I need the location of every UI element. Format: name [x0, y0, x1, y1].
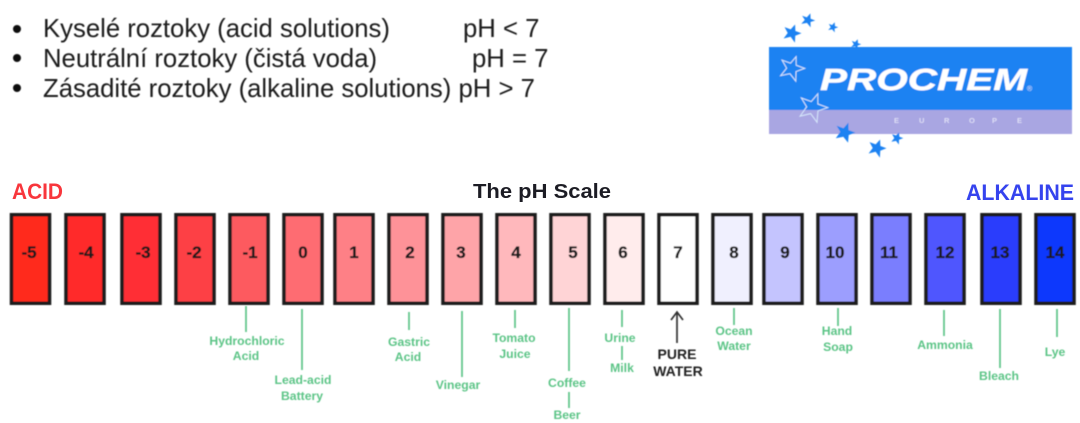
bullet: acid solutions: Kyselé roztoky (acid solutions)	[43, 15, 390, 43]
label: Pure Water with arrow: WATER	[653, 363, 703, 379]
logo: Prochem Europe: EUROPE	[894, 116, 1022, 125]
box 12	[926, 215, 964, 303]
logo: Prochem Europe	[769, 11, 1072, 159]
bullet: neutral solutions	[13, 45, 548, 73]
scale boxes	[12, 215, 1074, 303]
box -5: -5	[21, 243, 37, 262]
logo: Prochem Europe: PROCHEM	[820, 62, 1029, 97]
box 11: 11	[880, 243, 898, 262]
label: Lead-acid Battery	[275, 309, 331, 403]
label: Lead-acid Battery: Battery	[281, 389, 323, 403]
box 8: 8	[729, 243, 739, 262]
box 3	[443, 215, 481, 303]
bullet: alkaline solutions: Zásadité roztoky (alkaline solutions) pH > 7	[43, 75, 535, 103]
label: Coffee and Beer: Coffee	[548, 376, 586, 390]
label: Ocean Water: Ocean	[715, 324, 753, 338]
label: Lead-acid Battery: Lead-acid	[275, 373, 331, 387]
box 5: 5	[568, 243, 578, 262]
label: Ocean Water: Water	[717, 339, 751, 353]
box 13: 13	[991, 243, 1009, 262]
box -1: -1	[242, 243, 258, 262]
label: Hand Soap	[822, 308, 853, 354]
box 13	[982, 215, 1020, 303]
box 14	[1036, 215, 1074, 303]
icon: stars	[777, 11, 905, 159]
box 6	[605, 215, 643, 303]
label: Tomato Juice: Tomato	[492, 331, 536, 345]
box -3	[122, 215, 160, 303]
box 8	[713, 215, 751, 303]
text block: solution types	[13, 15, 548, 103]
heading: ACID: ACID	[12, 179, 63, 204]
box -1	[230, 215, 268, 303]
box 7: 7	[673, 243, 683, 262]
box -4: -4	[78, 243, 94, 262]
box 10	[818, 215, 856, 303]
label: Ocean Water	[715, 308, 753, 353]
box 1: 1	[349, 243, 359, 262]
box 1	[335, 215, 373, 303]
label: Tomato Juice: Juice	[499, 347, 531, 361]
box 10: 10	[826, 243, 844, 262]
box 6: 6	[618, 243, 628, 262]
box -5	[12, 215, 50, 303]
box 7	[659, 215, 697, 303]
box 5	[551, 215, 589, 303]
bullet: acid solutions	[13, 15, 539, 43]
box 14: 14	[1046, 243, 1065, 262]
box 3: 3	[456, 243, 466, 262]
box 9: 9	[780, 243, 790, 262]
heading: The pH Scale: The pH Scale	[473, 181, 611, 203]
label: Coffee and Beer	[548, 308, 586, 422]
logo: Prochem Europe: ®	[1027, 85, 1033, 93]
box 4	[497, 215, 535, 303]
label: Bleach	[979, 309, 1019, 383]
box 2	[389, 215, 427, 303]
box 2: 2	[405, 243, 415, 262]
bullet: neutral solutions: Neutrální roztoky (čistá voda)	[43, 45, 377, 73]
bullet: acid solutions: pH < 7	[463, 15, 539, 43]
box 11	[872, 215, 910, 303]
bullet: neutral solutions: pH = 7	[472, 45, 548, 73]
box 4: 4	[511, 243, 521, 262]
box -3: -3	[135, 243, 151, 262]
label: Urine and Milk: Urine	[604, 331, 636, 345]
label: Lye: Lye	[1045, 345, 1065, 359]
label: Vinegar: Vinegar	[436, 378, 480, 392]
label: Hydrochloric Acid	[209, 306, 285, 363]
label: Urine and Milk: Milk	[610, 361, 634, 375]
label: Gastric Acid: Acid	[395, 350, 421, 364]
heading: ALKALINE: ALKALINE	[966, 180, 1074, 205]
box 0: 0	[298, 243, 308, 262]
label: Gastric Acid	[388, 312, 430, 364]
label: Hydrochloric Acid: Hydrochloric	[209, 334, 285, 348]
box 9	[764, 215, 802, 303]
substance labels	[209, 306, 1065, 422]
label: Lye	[1045, 309, 1065, 359]
label: Hand Soap: Hand	[822, 324, 852, 338]
label: Hand Soap: Soap	[823, 340, 853, 354]
box -4	[66, 215, 104, 303]
label: Tomato Juice	[492, 310, 536, 361]
label: Pure Water with arrow	[653, 312, 703, 379]
label: Ammonia	[917, 310, 973, 352]
label: Hydrochloric Acid: Acid	[233, 349, 259, 363]
box 0	[284, 215, 322, 303]
box -2	[176, 215, 214, 303]
label: Bleach: Bleach	[979, 369, 1019, 383]
label: Ammonia: Ammonia	[917, 338, 973, 352]
label: Vinegar	[436, 311, 480, 392]
label: Urine and Milk	[604, 310, 636, 375]
box 12: 12	[936, 243, 954, 262]
label: Pure Water with arrow: PURE	[658, 346, 696, 362]
box -2: -2	[186, 243, 202, 262]
label: Gastric Acid: Gastric	[388, 335, 430, 349]
label: Coffee and Beer: Beer	[553, 408, 581, 422]
